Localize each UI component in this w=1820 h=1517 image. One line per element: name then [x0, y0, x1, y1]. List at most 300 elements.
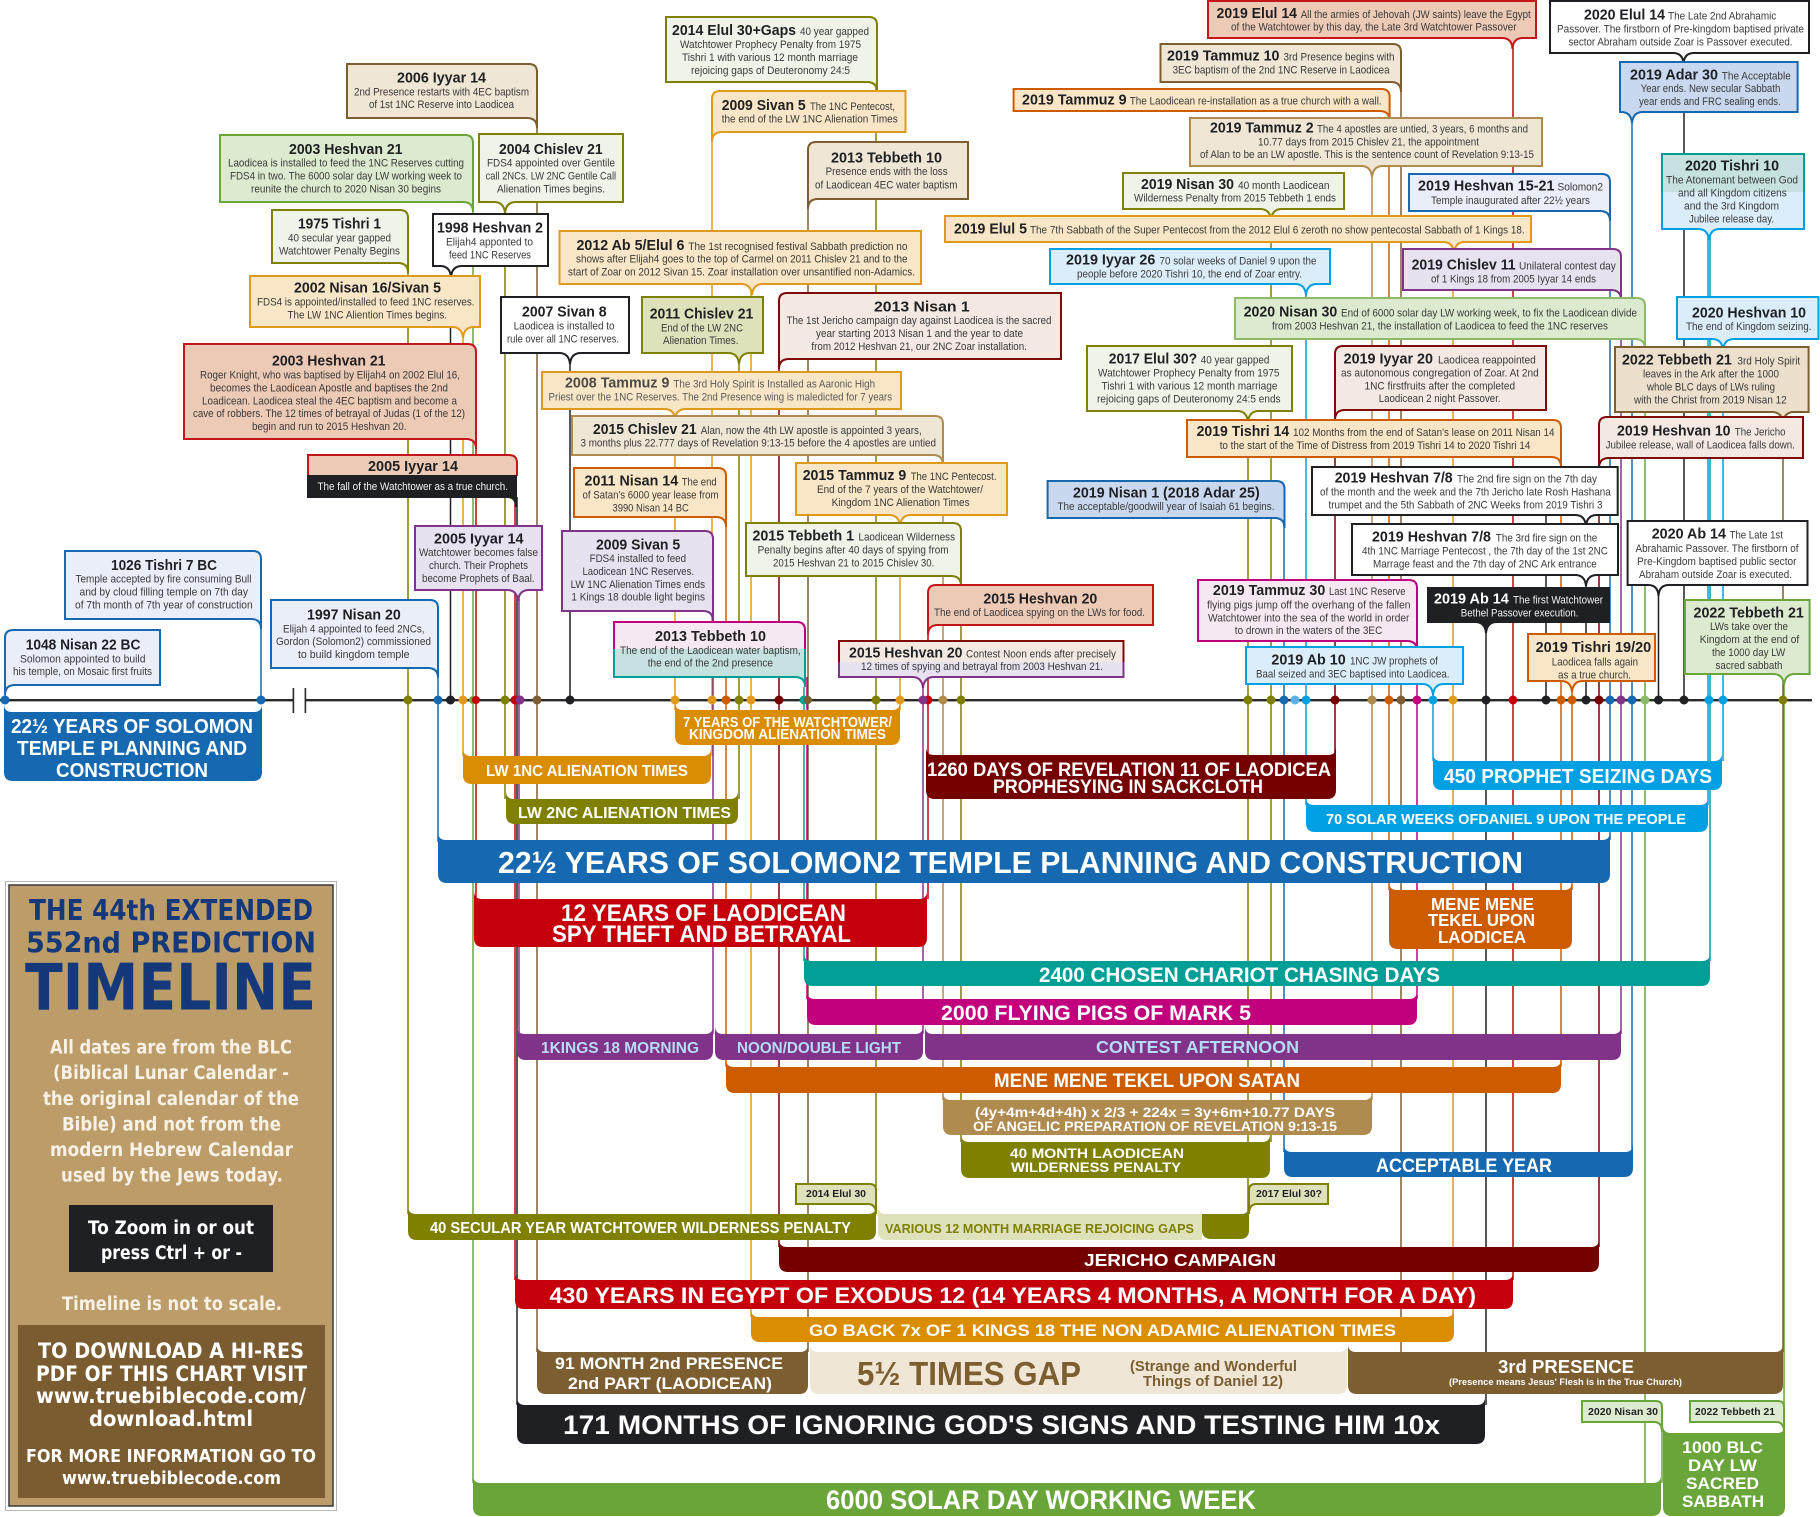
callout: 2004 Chislev 21: Alienation Times begins. — [497, 184, 605, 196]
bar: Mene Mene Tekel upon Satan: MENE MENE TEKEL UPON SATAN — [994, 1070, 1300, 1092]
callout: 2019 Heshvan 7/8 (2nd fire sign) — [1312, 467, 1618, 526]
callout: 2009 Sivan 5 (purple): 1 Kings 18 double light begins — [571, 592, 705, 604]
callout: 2015 Tammuz 9: The 1NC Pentecost. — [911, 471, 996, 483]
bar: various 12 month marriage rejoicing gaps — [878, 1206, 1202, 1240]
bar: 7 years of the Watchtower: 7 YEARS OF THE WATCHTOWER/ — [683, 715, 892, 731]
callout: 2007 Sivan 8 — [501, 297, 629, 364]
callout: 2015 Tebbeth 1: Penalty begins after 40 days of spying from — [758, 545, 949, 557]
callout: 2015 Chislev 21: Alan, now the 4th LW apostle is appointed 3 years, — [701, 425, 922, 437]
callout: 2019 Tammuz 10: 3rd Presence begins with — [1284, 52, 1394, 64]
callout: 2019 Tishri 19/20: as a true church. — [1558, 669, 1631, 681]
callout: 2019 Tishri 14 — [1187, 420, 1561, 467]
callout: 1048 Nisan 22 BC: his temple, on Mosaic first fruits — [13, 666, 152, 678]
callout: 2003 Heshvan 21 (red): 2003 Heshvan 21 — [272, 354, 386, 370]
bar: go back 7x — [751, 1309, 1454, 1342]
callout: 1026 Tishri 7 BC: 1026 Tishri 7 BC — [111, 558, 217, 574]
callout: 2003 Heshvan 21 (green) — [220, 135, 473, 212]
callout: 2019 Tammuz 30: flying pigs jump off the overhang of the fallen — [1207, 599, 1410, 611]
callout: 2019 Tammuz 30: Last 1NC Reserve — [1329, 586, 1405, 598]
callout: 2020 Nisan 30: 2020 Nisan 30 — [1244, 305, 1337, 321]
callout: 2020 Elul 14 — [1550, 1, 1809, 64]
callout: 2019 Iyyar 20: Laodicean 2 night Passover. — [1379, 393, 1501, 405]
callout: 2011 Nisan 14: 2011 Nisan 14 — [584, 473, 678, 489]
callout: 2014 Elul 30+Gaps: rejoicing gaps of Deuteronomy 24:5 — [691, 65, 850, 77]
bar: 22½ years of Solomon: TEMPLE PLANNING AND — [17, 738, 247, 760]
callout: 2015 Tammuz 9: End of the 7 years of the Watchtower/ — [817, 484, 984, 496]
callout: 2019 Tammuz 9: 2019 Tammuz 9 — [1022, 92, 1127, 108]
callout: 2019 Adar 30: year ends and FRC sealing ends. — [1639, 96, 1781, 108]
callout: 2012 Ab 5/Elul 6: shows after Elijah4 goes to the top of Carmel on 2011 Chislev 21 and to the — [576, 254, 908, 266]
bar: Mene Mene Tekel upon Satan — [726, 1059, 1561, 1093]
callout: 2013 Nisan 1: The 1st Jericho campaign day against Laodicea is the sacred — [786, 315, 1052, 327]
callout: 2019 Heshvan 10 — [1599, 417, 1803, 468]
bar: 450 prophet seizing days: 450 PROPHET SEIZING DAYS — [1444, 766, 1712, 788]
callout: 2019 Iyyar 20: 1NC firstfruits after the completed — [1364, 380, 1515, 392]
bar: 5½ times gap — [810, 1344, 1347, 1394]
callout: 2019 Tammuz 2: The 4 apostles are untied, 3 years, 6 months and — [1317, 123, 1528, 135]
callout: 1048 Nisan 22 BC: 1048 Nisan 22 BC — [26, 637, 141, 653]
callout: 2014 Elul 30+Gaps: Watchtower Prophecy Penalty from 1975 — [680, 39, 861, 51]
callout: 2017 Elul 30?: rejoicing gaps of Deuteronomy 24:5 ends — [1097, 393, 1281, 405]
callout: 2009 Sivan 5 (orange): 2009 Sivan 5 — [722, 98, 806, 114]
callout: 2002 Nisan 16/Sivan 5: The LW 1NC Aliention Times begins. — [288, 310, 447, 322]
bar: Mene Mene Tekel upon Laodicea: MENE MENE — [1431, 894, 1534, 914]
callout: 2013 Tebbeth 10 (magenta and teal) — [614, 622, 805, 687]
callout: 2014 Elul 30+Gaps: 2014 Elul 30+Gaps — [672, 23, 796, 39]
callout: 2019 Tammuz 10: 2019 Tammuz 10 — [1167, 49, 1280, 65]
callout: 2020 Ab 14: Pre-Kingdom baptised public sector — [1637, 556, 1797, 568]
callout: 2019 Heshvan 10: 2019 Heshvan 10 — [1617, 423, 1730, 439]
callout: 2003 Heshvan 21 (green): Laodicea is installed to feed the 1NC Reserves cutting — [228, 158, 464, 170]
callout: 2019 Nisan 1 — [1048, 481, 1284, 528]
panel: download information — [18, 1325, 325, 1498]
callout: 2019 Iyyar 26: 70 solar weeks of Daniel 9 upon the — [1160, 255, 1316, 267]
callout: 2013 Nisan 1: year starting 2013 Nisan 1 and the year to date — [816, 328, 1023, 340]
callout: 2013 Tebbeth 10 (brown) — [808, 142, 968, 209]
bar: 2000 flying pigs — [807, 991, 1417, 1025]
callout: 2019 Tammuz 10: 3EC baptism of the 2nd 1NC Reserve in Laodicea — [1173, 64, 1390, 76]
callout: 2022 Tebbeth 21 (green): the 1000 day LW — [1712, 647, 1786, 659]
callout: 2005 Iyyar 14 (fall of the Watchtower): 2005 Iyyar 14 — [368, 459, 458, 475]
bar: 1000 BLC day LW sacred sabbath — [1663, 1425, 1785, 1516]
callout: 2003 Heshvan 21 (red): cave of robbers. The 12 times of betrayal of Judas (1 of the 12) — [193, 408, 465, 420]
bar: 2000 flying pigs: 2000 FLYING PIGS OF MARK 5 — [941, 1002, 1251, 1025]
bar: angelic preparation — [943, 1092, 1372, 1135]
bar: 1 Kings 18 morning: 1KINGS 18 MORNING — [541, 1040, 699, 1057]
callout: 2017 Elul 30?: 40 year gapped — [1201, 354, 1269, 366]
bar: Mene Mene Tekel upon Laodicea: TEKEL UPON — [1428, 910, 1535, 930]
callout: 2005 Iyyar 14 (purple) — [415, 526, 542, 601]
bar: 1260 days — [926, 747, 1336, 799]
callout: 2019 Ab 14 (black): The first Watchtower — [1513, 594, 1603, 606]
callout: 2019 Ab 10: Baal seized and 3EC baptised into Laodicea. — [1256, 668, 1450, 680]
callout: 2019 Ab 14 (black) — [1428, 588, 1609, 633]
callout: 2022 Tebbeth 21 (green): 2022 Tebbeth 21 — [1694, 605, 1804, 621]
date callout boxes — [5, 1, 1818, 695]
text block: calendar note — [43, 1038, 299, 1187]
callout: 2011 Chislev 21: End of the LW 2NC — [661, 322, 743, 334]
bar: 430 years in Egypt — [515, 1272, 1513, 1309]
label: 2017 Elul 30? — [1249, 1184, 1328, 1214]
bar: various 12 month marriage rejoicing gaps: VARIOUS 12 MONTH MARRIAGE REJOICING GAPS — [885, 1221, 1194, 1236]
bar: 1000 BLC day LW sacred sabbath: 1000 BLC — [1682, 1438, 1763, 1457]
bar: 3rd presence: 3rd PRESENCE — [1498, 1356, 1634, 1377]
panel: download information: download.html — [89, 1407, 253, 1431]
bar: LW 2NC alienation times — [506, 791, 738, 824]
label: 2022 Tebbeth 21: 2022 Tebbeth 21 — [1695, 1406, 1775, 1418]
bar: 3rd presence: (Presence means Jesus' Flesh is in the True Church) — [1449, 1377, 1682, 1388]
callout: 2019 Nisan 1: 2019 Nisan 1 (2018 Adar 25) — [1073, 485, 1260, 501]
callout: 2022 Tebbeth 21 (green): sacred sabbath — [1716, 660, 1782, 672]
bar: 40 month Laodicean wilderness penalty: WILDERNESS PENALTY — [1011, 1159, 1182, 1175]
callout: 2004 Chislev 21: FDS4 appointed over Gentile — [487, 158, 615, 170]
bar: acceptable year: ACCEPTABLE YEAR — [1376, 1155, 1552, 1177]
panel: chart title and information — [6, 882, 336, 1510]
callout: 2005 Iyyar 14 (fall of the Watchtower): The fall of the Watchtower as a true church. — [318, 481, 508, 493]
callout: 2002 Nisan 16/Sivan 5: 2002 Nisan 16/Sivan 5 — [294, 281, 441, 297]
callout: 2019 Elul 5 — [945, 216, 1531, 253]
callout: 2005 Iyyar 14 (purple): 2005 Iyyar 14 — [434, 531, 524, 547]
callout: 2015 Heshvan 20 (two tone): Contest Noon ends after precisely — [966, 648, 1116, 660]
callout: 2020 Elul 14: The Late 2nd Abrahamic — [1668, 10, 1777, 22]
callout: 2019 Nisan 30: 2019 Nisan 30 — [1141, 177, 1234, 193]
callout: 2009 Sivan 5 (purple): 2009 Sivan 5 — [596, 537, 680, 553]
bar: Jericho campaign: JERICHO CAMPAIGN — [1084, 1250, 1276, 1270]
callout: 2019 Tishri 14: 102 Months from the end of Satan's lease on 2011 Nisan 14 — [1293, 427, 1554, 439]
callout: 2005 Iyyar 14 (purple): become Prophets of Baal. — [422, 573, 535, 585]
callout: 2019 Nisan 1: The acceptable/goodwill year of Isaiah 61 begins. — [1058, 501, 1274, 513]
callout: 2013 Nisan 1: 2013 Nisan 1 — [874, 300, 970, 316]
callout: 2015 Heshvan 20 (two tone) — [839, 641, 1124, 688]
callout: 2020 Tishri 10: and all Kingdom citizens — [1678, 188, 1787, 200]
callout: 2019 Tishri 19/20: 2019 Tishri 19/20 — [1536, 640, 1651, 656]
callout: 2022 Tebbeth 21 (green): Kingdom at the end of — [1700, 634, 1800, 646]
bar: 40 month Laodicean wilderness penalty: 40 MONTH LAODICEAN — [1010, 1145, 1184, 1161]
callout: 2011 Chislev 21: 2011 Chislev 21 — [650, 306, 753, 322]
bar: Jericho campaign — [779, 1239, 1599, 1272]
callout: 2020 Ab 14: Abrahamic Passover. The firstborn of — [1636, 543, 1799, 555]
bar: 40 secular year Watchtower penalty — [408, 1206, 876, 1240]
callout: zoom instruction: To Zoom in or out — [88, 1218, 254, 1239]
callout: 2006 Iyyar 14: 2nd Presence restarts with 4EC baptism — [354, 86, 529, 98]
text block: calendar note: (Biblical Lunar Calendar - — [53, 1063, 289, 1084]
bar: 1 Kings 18 morning — [517, 1026, 713, 1060]
callout: 1048 Nisan 22 BC — [5, 630, 160, 695]
callout: 2022 Tebbeth 21 (brown): leaves in the Ark after the 1000 — [1643, 369, 1779, 381]
text block: calendar note: Bible) and not from the — [62, 1114, 281, 1135]
panel: download information: www.truebiblecode.com — [62, 1468, 281, 1489]
callout: 2019 Iyyar 20: as autonomous congregation of Zoar. At 2nd — [1341, 367, 1539, 379]
bar: 171 months — [517, 1397, 1485, 1444]
bar: 1000 BLC day LW sacred sabbath: DAY LW — [1688, 1456, 1758, 1475]
bar: 2400 chosen chariot chasing days: 2400 CHOSEN CHARIOT CHASING DAYS — [1039, 964, 1440, 987]
callout: 2020 Tishri 10: 2020 Tishri 10 — [1685, 159, 1779, 175]
label: 2020 Nisan 30 — [1582, 1401, 1662, 1432]
callout: 2013 Nisan 1: from 2012 Heshvan 21, our 2NC Zoar installation. — [811, 341, 1027, 353]
callout: 2022 Tebbeth 21 (brown): 3rd Holy Spirit — [1737, 356, 1800, 368]
callout: 2019 Heshvan 7/8 (3rd fire sign): Marrage feast and the 7th day of 2NC Ark entrance — [1373, 559, 1597, 571]
callout: 2019 Elul 14 — [1208, 1, 1536, 49]
title: THE 44th EXTENDED — [29, 894, 313, 927]
callout: 2004 Chislev 21: call 2NCs. LW 2NC Gentile Call — [486, 171, 616, 183]
callout: 2019 Heshvan 15-21: Temple inaugurated after 22½ years — [1431, 195, 1590, 207]
callout: 2012 Ab 5/Elul 6: start of Zoar on 2012 Sivan 15. Zoar installation over unsantified non-Adamics. — [568, 267, 915, 279]
callout: 2015 Tammuz 9: Kingdom 1NC Alienation Times — [832, 497, 970, 509]
bar: 171 months: 171 MONTHS OF IGNORING GOD'S SIGNS AND TESTING HIM 10x — [563, 1410, 1440, 1440]
callout: 2020 Nisan 30: End of 6000 solar day LW working week, to fix the Laodicean divide — [1341, 308, 1637, 320]
callout: 2015 Chislev 21: 2015 Chislev 21 — [593, 422, 697, 438]
callout: 2003 Heshvan 21 (red): becomes the Laodicean Apostle and baptises the 2nd — [210, 382, 448, 394]
callout: 2009 Sivan 5 (orange): The 1NC Pentecost, — [810, 101, 895, 113]
callout: 2020 Tishri 10: and the 3rd Kingdom — [1684, 200, 1779, 212]
callout: 2019 Heshvan 15-21 — [1409, 174, 1610, 221]
callout: 1026 Tishri 7 BC: Temple accepted by fire consuming Bull — [76, 574, 252, 586]
callout: 2005 Iyyar 14 (fall of the Watchtower) — [308, 455, 517, 507]
callout: 2015 Heshvan 20 (red): The end of Laodicea spying on the LWs for food. — [934, 607, 1145, 619]
callout: 2019 Nisan 30: Wilderness Penalty from 2015 Tebbeth 1 ends — [1134, 193, 1336, 205]
callout: 2019 Elul 5: 2019 Elul 5 — [954, 221, 1027, 237]
bar: noon double light: NOON/DOUBLE LIGHT — [737, 1040, 902, 1057]
timeline date dots — [0, 696, 1788, 704]
period bars — [4, 702, 1785, 1516]
callout: 2015 Tebbeth 1: 2015 Heshvan 21 to 2015 Chislev 30. — [773, 558, 934, 570]
callout: 2019 Iyyar 26: people before 2020 Tishri 10, the end of Zoar entry. — [1077, 268, 1302, 280]
callout: 2019 Tammuz 30: 2019 Tammuz 30 — [1213, 583, 1325, 599]
callout: 2006 Iyyar 14: of 1st 1NC Reserve into Laodicea — [369, 99, 515, 111]
bar: 12 years of Laodicean spy theft: SPY THEFT AND BETRAYAL — [552, 921, 851, 948]
callout: 1026 Tishri 7 BC — [65, 551, 261, 629]
bar: olive gap end — [1202, 1206, 1249, 1239]
main timeline axis — [0, 688, 1812, 713]
callout: 2019 Heshvan 15-21: 2019 Heshvan 15-21 — [1418, 179, 1554, 195]
callout: 2008 Tammuz 9: The 3rd Holy Spirit is Installed as Aaronic High — [673, 379, 875, 391]
callout: 2019 Nisan 30: 40 month Laodicean — [1238, 180, 1330, 192]
callout: 2006 Iyyar 14 — [347, 64, 537, 128]
callout: 2019 Heshvan 7/8 (3rd fire sign): 4th 1NC Marriage Pentecost , the 7th day of the 1st 2NC — [1362, 546, 1608, 558]
callout: 1975 Tishri 1: 40 secular year gapped — [288, 233, 391, 245]
callout: 2020 Tishri 10: Jubilee release day. — [1689, 213, 1774, 225]
callout: 1975 Tishri 1: Watchtower Penalty Begins — [279, 245, 400, 257]
callout: 2015 Tebbeth 1: Laodicean Wilderness — [858, 532, 955, 544]
callout: 2019 Iyyar 20 — [1335, 346, 1546, 420]
callout: 2017 Elul 30?: Tishri 1 with various 12 month marriage — [1102, 380, 1278, 392]
callout: 2014 Elul 30+Gaps: Tishri 1 with various 12 month marriage — [682, 52, 858, 64]
callout: 1997 Nisan 20: 1997 Nisan 20 — [307, 608, 401, 624]
bar: 12 years of Laodicean spy theft — [474, 891, 927, 948]
bar: LW 2NC alienation times: LW 2NC ALIENATION TIMES — [518, 805, 731, 822]
callout: 1997 Nisan 20: Elijah 4 appointed to feed 2NCs, — [283, 623, 424, 635]
callout: 2019 Tammuz 2 — [1190, 118, 1542, 177]
callout: 2011 Nisan 14: of Satan's 6000 year lease from — [582, 489, 718, 501]
callout: 2007 Sivan 8: 2007 Sivan 8 — [522, 305, 607, 321]
callout: 2019 Heshvan 7/8 (2nd fire sign): 2019 Heshvan 7/8 — [1335, 471, 1453, 487]
callout: 2009 Sivan 5 (orange): the end of the LW 1NC Alienation Times — [722, 114, 898, 126]
callout: 2019 Heshvan 7/8 (3rd fire sign): 2019 Heshvan 7/8 — [1372, 530, 1491, 546]
callout: 2020 Nisan 30 — [1235, 298, 1645, 349]
callout: 2015 Chislev 21: 3 months plus 22.777 days of Revelation 9:13-15 before the 4 apostles are untied — [580, 438, 936, 450]
callout: 2019 Tammuz 2: 10.77 days from 2015 Chislev 21, the appointment — [1258, 136, 1479, 148]
callout: 2022 Tebbeth 21 (green): LWs take over the — [1710, 621, 1788, 633]
callout: 2020 Elul 14: sector Abraham outside Zoar is Passover executed. — [1568, 36, 1792, 48]
callout: 2019 Ab 10: 1NC JW prophets of — [1350, 655, 1439, 667]
callout: 2008 Tammuz 9 — [542, 372, 901, 419]
label: 2020 Nisan 30: 2020 Nisan 30 — [1588, 1406, 1658, 1418]
callout: 2013 Tebbeth 10 (brown): of Laodicean 4EC water baptism — [815, 179, 957, 191]
callout: 2003 Heshvan 21 (red): Roger Knight, who was baptised by Elijah4 on 2002 Elul 16, — [200, 369, 460, 381]
callout: 2005 Iyyar 14 (purple): Watchtower becomes false — [419, 547, 538, 559]
callout: zoom instruction: press Ctrl + or - — [101, 1243, 242, 1264]
callout: 2020 Ab 14: Abraham outside Zoar is executed. — [1639, 569, 1792, 581]
callout: 2019 Ab 14 (black): Bethel Passover execution. — [1461, 607, 1578, 619]
callout: 2012 Ab 5/Elul 6 — [560, 231, 921, 295]
bar: go back 7x: GO BACK 7x OF 1 KINGS 18 THE NON ADAMIC ALIENATION TIMES — [809, 1321, 1396, 1340]
bar: angelic preparation: OF ANGELIC PREPARATION OF REVELATION 9:13-15 — [973, 1118, 1337, 1134]
label: 2017 Elul 30?: 2017 Elul 30? — [1256, 1188, 1322, 1200]
bar: 91 month 2nd presence: 91 MONTH 2nd PRESENCE — [555, 1354, 783, 1373]
callout: 2019 Iyyar 20: 2019 Iyyar 20 — [1344, 351, 1433, 367]
callout: 1997 Nisan 20: to build kingdom temple — [298, 649, 410, 661]
callout: 2011 Chislev 21 — [642, 297, 763, 364]
bar: Mene Mene Tekel upon Laodicea: LAODICEA — [1438, 927, 1526, 947]
callout: 1998 Heshvan 2 — [433, 214, 548, 277]
bar: 5½ times gap: Things of Daniel 12) — [1143, 1373, 1283, 1390]
callout: 2019 Adar 30 — [1620, 62, 1798, 123]
callout: 2015 Tebbeth 1 — [746, 523, 961, 586]
label: 2014 Elul 30: 2014 Elul 30 — [806, 1188, 866, 1200]
callout: 2008 Tammuz 9: 2008 Tammuz 9 — [565, 376, 669, 392]
callout: 2009 Sivan 5 (purple): LW 1NC Alienation Times ends — [571, 579, 705, 591]
callout: 2019 Ab 10: 2019 Ab 10 — [1271, 652, 1346, 668]
callout: 2015 Tammuz 9 — [796, 463, 1007, 526]
callout: 2019 Tammuz 2: 2019 Tammuz 2 — [1210, 120, 1314, 136]
callout: 1026 Tishri 7 BC: and by cloud filling temple on 7th day — [80, 587, 248, 599]
callout: 2014 Elul 30+Gaps — [666, 17, 877, 92]
label: 2014 Elul 30 — [796, 1184, 876, 1214]
callout: 2019 Elul 5: The 7th Sabbath of the Super Pentecost from the 2012 Elul 6 zeroth no show pentecostal Sabbath of 1 Kings 18. — [1030, 224, 1525, 236]
callout: 2011 Nisan 14: 3990 Nisan 14 BC — [612, 502, 689, 514]
callout: 2019 Heshvan 7/8 (3rd fire sign): The 3rd fire sign on the — [1496, 533, 1597, 545]
callout: 2020 Heshvan 10: 2020 Heshvan 10 — [1692, 305, 1806, 321]
bar: contest afternoon — [925, 1026, 1621, 1060]
callout: 2022 Tebbeth 21 (brown): 2022 Tebbeth 21 — [1622, 353, 1732, 369]
bar: 40 month Laodicean wilderness penalty — [961, 1134, 1270, 1178]
callout: 2009 Sivan 5 (purple) — [562, 531, 713, 621]
panel: download information: www.truebiblecode.com/ — [36, 1384, 306, 1408]
callout: 2003 Heshvan 21 (red): begin and run to 2015 Heshvan 20. — [252, 421, 406, 433]
bar: acceptable year — [1284, 1144, 1633, 1177]
callout: 2015 Chislev 21 — [572, 416, 943, 465]
callout: 2019 Elul 14: All the armies of Jehovah (JW saints) leave the Egypt — [1301, 9, 1531, 21]
bar: 1000 BLC day LW sacred sabbath: SABBATH — [1682, 1492, 1764, 1511]
callout: 2011 Nisan 14 — [574, 468, 726, 527]
callout: 2019 Tishri 14: to the start of the Time of Distress from 2019 Tishri 14 to 2020 Tishri 14 — [1220, 440, 1530, 452]
callout: 2022 Tebbeth 21 (brown): with the Christ from 2019 Nisan 12 — [1633, 394, 1787, 406]
callout: 2019 Elul 14: 2019 Elul 14 — [1216, 6, 1297, 22]
callout: 2011 Chislev 21: Alienation Times. — [663, 335, 738, 347]
callout: 2019 Tammuz 30: Watchtower into the sea of the world in order — [1208, 612, 1410, 624]
callout: 2002 Nisan 16/Sivan 5: FDS4 is appointed/installed to feed 1NC reserves. — [257, 297, 474, 309]
callout: 2019 Heshvan 7/8 (2nd fire sign): trumpet and the 5th Sabbath of 2NC Weeks from 2019 Tishri 3 — [1328, 500, 1602, 512]
bar: 5½ times gap: 5½ TIMES GAP — [857, 1355, 1081, 1392]
callout: 2008 Tammuz 9: Priest over the 1NC Reserves. The 2nd Presence wing is maledicted for 7 years — [548, 392, 893, 404]
callout: 2019 Tammuz 30: to drown in the waters of the 3EC — [1235, 625, 1382, 637]
callout: 2007 Sivan 8: Laodicea is installed to — [514, 320, 615, 332]
callout: 2011 Nisan 14: The end — [682, 476, 717, 488]
panel: download information: FOR MORE INFORMATION GO TO — [26, 1446, 316, 1467]
callout: 2019 Heshvan 7/8 (3rd fire sign) — [1352, 524, 1618, 586]
callout: 2022 Tebbeth 21 (brown) — [1615, 347, 1809, 423]
bar: 5½ times gap: (Strange and Wonderful — [1130, 1358, 1297, 1375]
callout: 2009 Sivan 5 (purple): FDS4 installed to feed — [590, 553, 686, 565]
bar: angelic preparation: (4y+4m+4d+4h) x 2/3 + 224x = 3y+6m+10.77 DAYS — [975, 1104, 1335, 1120]
callout: 2019 Adar 30: The Acceptable — [1722, 70, 1791, 82]
bar: 22½ years of Solomon: 22½ YEARS OF SOLOMON — [11, 716, 253, 738]
callout: 1048 Nisan 22 BC: Solomon appointed to build — [20, 653, 146, 665]
callout: 2020 Ab 14: The Late 1st — [1730, 530, 1783, 542]
bar: 7 years of the Watchtower: KINGDOM ALIENATION TIMES — [689, 727, 886, 743]
bar: LW 1NC alienation times: LW 1NC ALIENATION TIMES — [486, 763, 688, 780]
bar: 40 secular year Watchtower penalty: 40 SECULAR YEAR WATCHTOWER WILDERNESS PENALTY — [430, 1220, 852, 1237]
callout: 1998 Heshvan 2: feed 1NC Reserves — [449, 249, 531, 261]
bar: LW 1NC alienation times — [463, 748, 711, 784]
callout: 2002 Nisan 16/Sivan 5 — [250, 276, 480, 338]
callout: 2019 Heshvan 10: The Jericho — [1735, 426, 1786, 438]
bar: 22½ years of Solomon2 — [438, 832, 1610, 883]
bar: 1000 BLC day LW sacred sabbath: SACRED — [1686, 1474, 1759, 1493]
callout: 1998 Heshvan 2: 1998 Heshvan 2 — [437, 220, 543, 236]
bar: 70 solar weeks — [1306, 797, 1708, 832]
bar: 22½ years of Solomon — [4, 704, 262, 782]
bar: 7 years of the Watchtower — [675, 702, 900, 745]
callout: 2019 Tammuz 10 — [1160, 44, 1401, 92]
callout: 2019 Chislev 11: Unilateral contest day — [1519, 260, 1616, 272]
callout: 1998 Heshvan 2: Elijah4 apponted to — [446, 236, 533, 248]
text block: calendar note: modern Hebrew Calendar — [50, 1140, 294, 1161]
callout: 2003 Heshvan 21 (red): Loadicean. Laodicea steal the 4EC baptism and become a — [202, 395, 458, 407]
callout: 2013 Nisan 1 — [779, 293, 1061, 369]
panel: download information: TO DOWNLOAD A HI-RES — [38, 1339, 304, 1363]
callout: 2004 Chislev 21: 2004 Chislev 21 — [499, 142, 603, 158]
callout: 2019 Tammuz 2: of Alan to be an LW apostle. This is the sentence count of Revelation 9:13-15 — [1200, 149, 1534, 161]
callout: 2019 Iyyar 26 — [1050, 249, 1330, 295]
bar: 450 prophet seizing days — [1433, 753, 1722, 790]
callout: 2020 Elul 14: 2020 Elul 14 — [1584, 7, 1665, 23]
callout: 2009 Sivan 5 (orange) — [712, 91, 906, 142]
callout: 2015 Tammuz 9: 2015 Tammuz 9 — [803, 468, 906, 484]
callout: 2019 Nisan 30 — [1123, 173, 1344, 220]
callout: 1997 Nisan 20: Gordon (Solomon2) commissioned — [276, 636, 431, 648]
callout: 2003 Heshvan 21 (green): 2003 Heshvan 21 — [289, 142, 402, 158]
callout: 2015 Heshvan 20 (two tone): 12 times of spying and betrayal from 2003 Heshvan 21. — [861, 661, 1103, 673]
callout: 2013 Tebbeth 10 (magenta and teal): the end of the 2nd presence — [648, 658, 773, 670]
callout: 2022 Tebbeth 21 (brown): whole BLC days of LWs ruling — [1646, 382, 1775, 394]
callout: 2015 Heshvan 20 (two tone): 2015 Heshvan 20 — [849, 645, 962, 661]
text block: calendar note: the original calendar of the — [43, 1089, 299, 1110]
callout: 2019 Heshvan 7/8 (2nd fire sign): The 2nd fire sign on the 7th day — [1457, 474, 1597, 486]
callout: 2012 Ab 5/Elul 6: 2012 Ab 5/Elul 6 — [576, 238, 684, 254]
bar: 3rd presence — [1348, 1344, 1783, 1394]
callout: 1975 Tishri 1 — [272, 210, 408, 273]
callout: 2019 Chislev 11: 2019 Chislev 11 — [1412, 257, 1516, 273]
bar: 1260 days: 1260 DAYS OF REVELATION 11 OF LAODICEA — [927, 759, 1331, 781]
callout: 2019 Tishri 19/20: Laodicea falls again — [1552, 656, 1638, 668]
callout: 2019 Chislev 11: of 1 Kings 18 from 2005 Iyyar 14 ends — [1431, 273, 1596, 285]
callout: 1975 Tishri 1: 1975 Tishri 1 — [298, 216, 381, 232]
callout: 2019 Chislev 11 — [1403, 249, 1621, 300]
callout: 2019 Adar 30: Year ends. New secular Sabbath — [1641, 83, 1780, 95]
callout: 2020 Ab 14 — [1628, 521, 1808, 596]
callout: 2019 Heshvan 7/8 (2nd fire sign): of the month and the week and the 7th Jericho late Rosh Hashana — [1320, 487, 1612, 499]
